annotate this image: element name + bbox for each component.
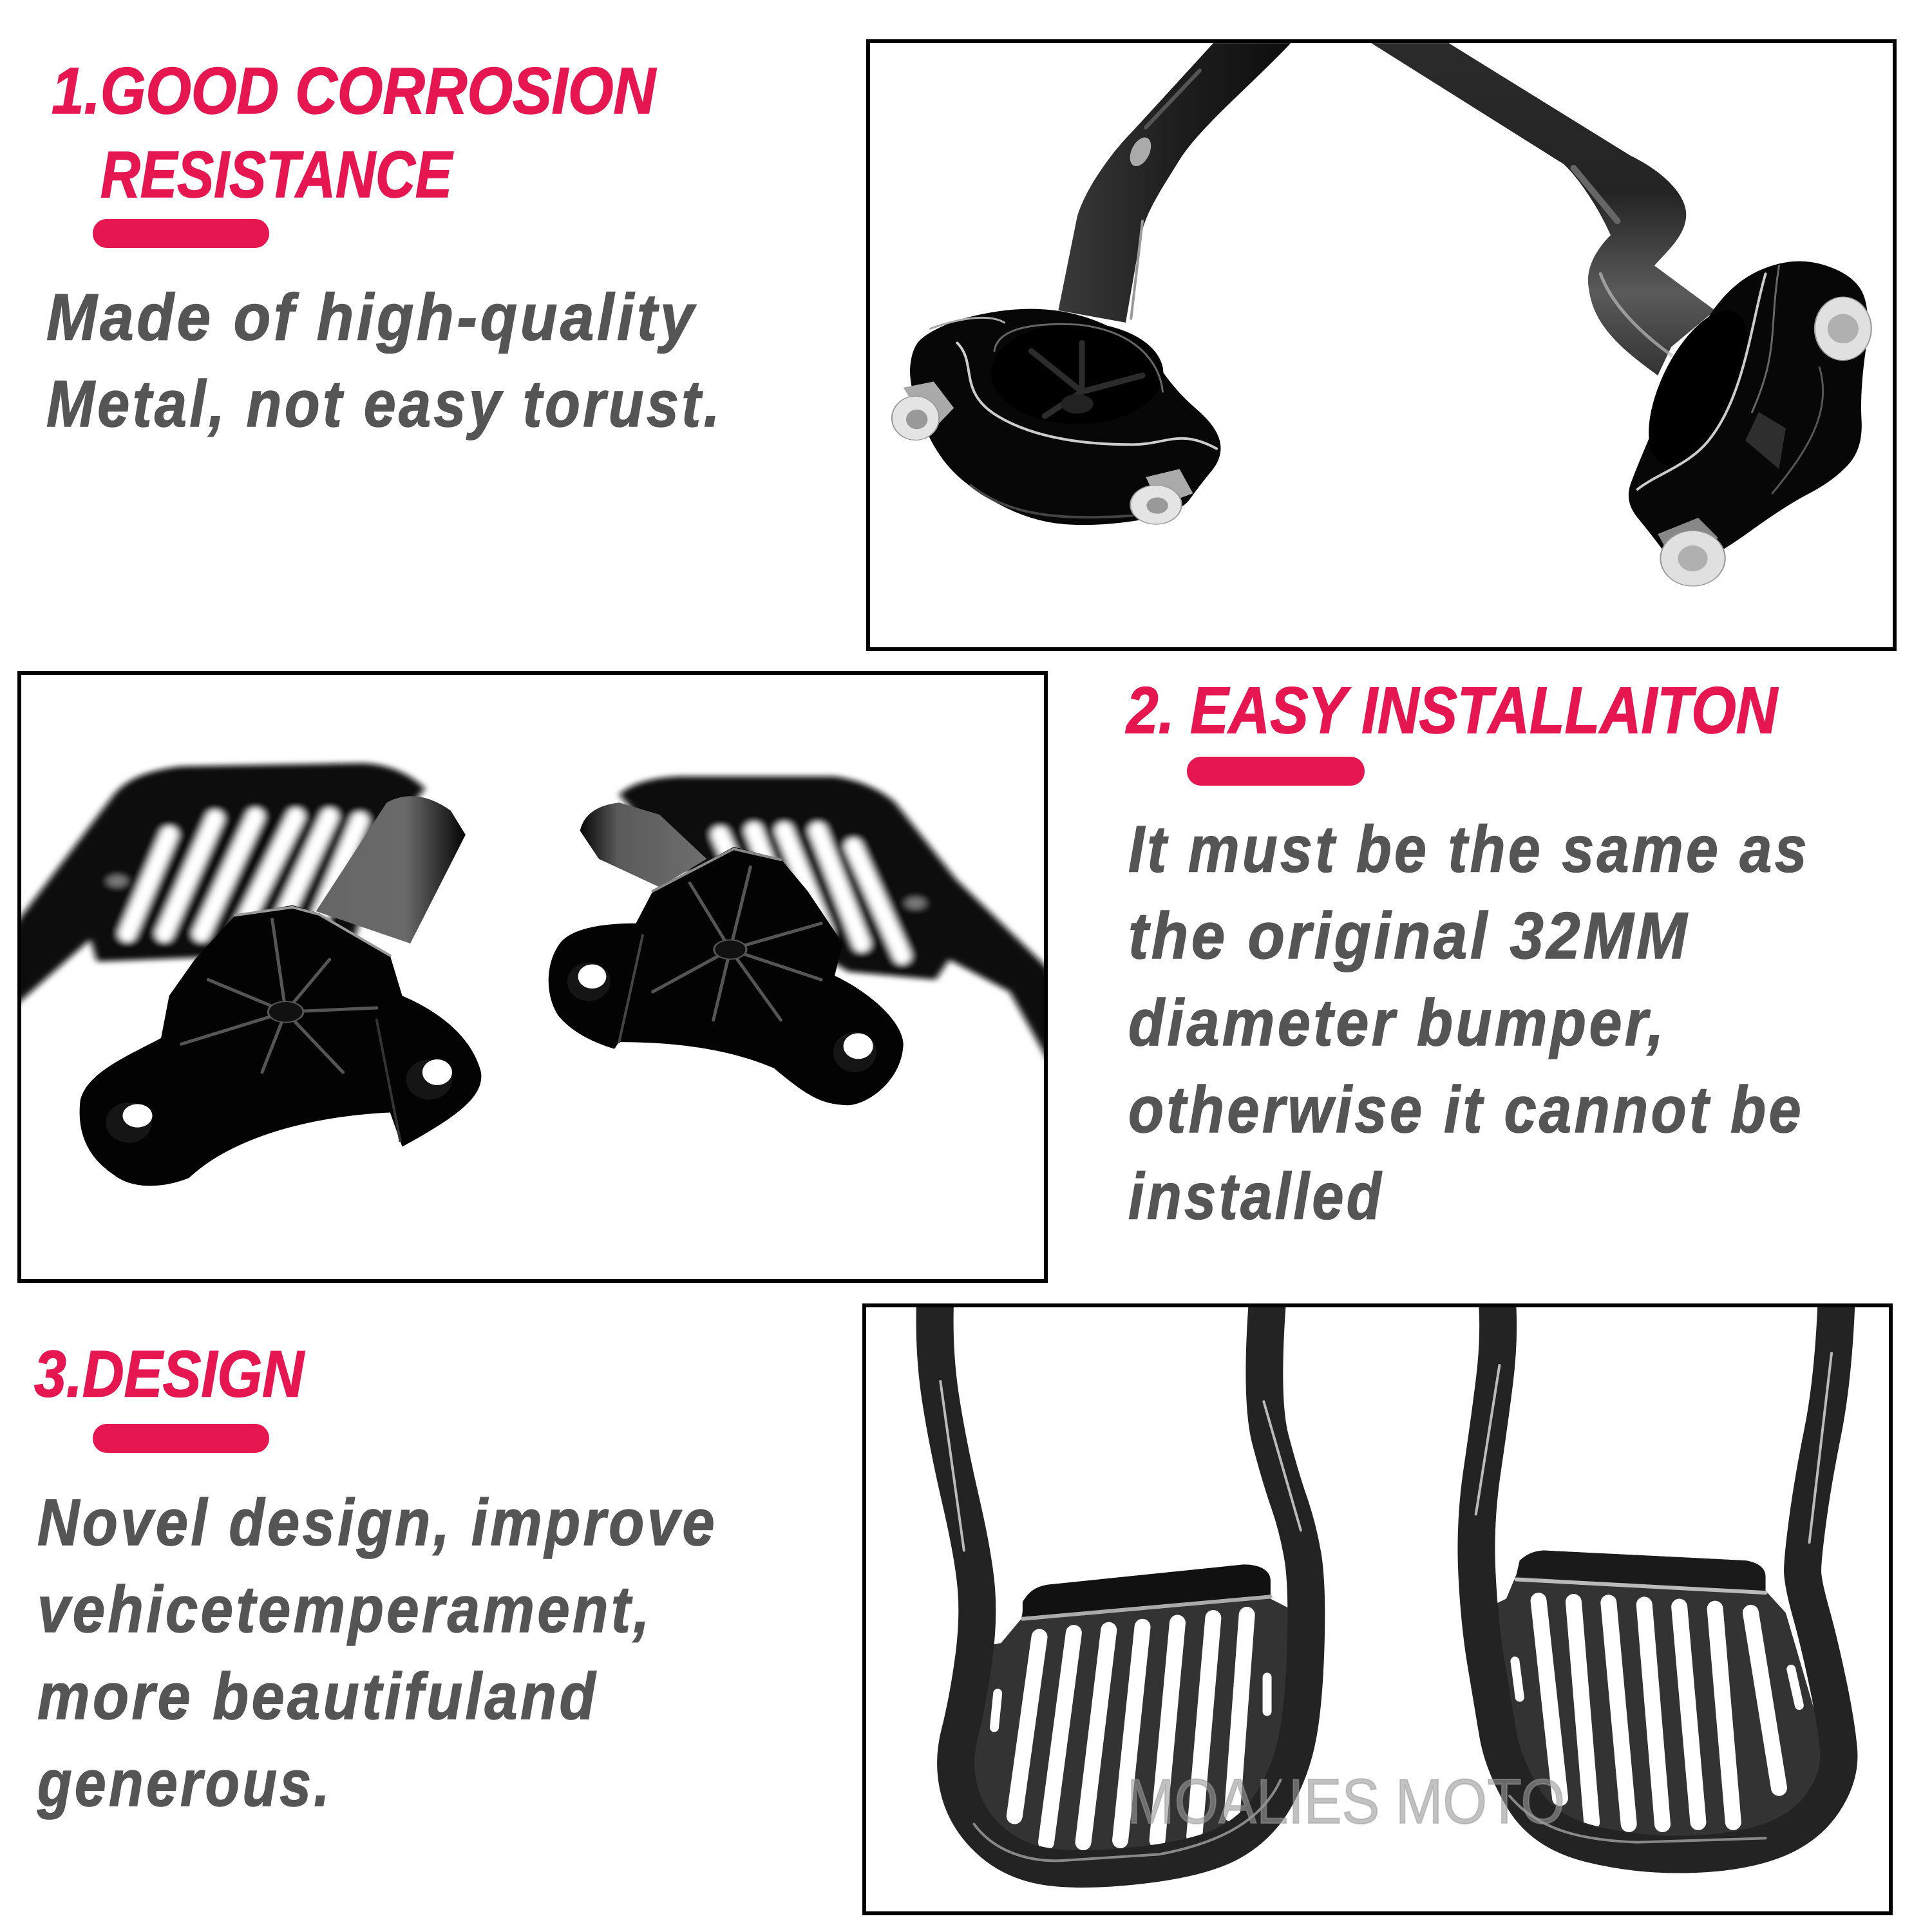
right clamp — [1629, 261, 1868, 565]
panel: photo of racks — [864, 1305, 1891, 1913]
heading: good corrosion resistance: 1.GOOD CORROSION — [52, 54, 657, 128]
left mount — [80, 905, 481, 1186]
panel: feature 1 text — [46, 54, 723, 440]
panel: feature 3 text — [34, 1337, 717, 1820]
body text 3: Novel design, improve — [37, 1486, 717, 1559]
left clamp bolts — [892, 381, 1193, 524]
left rack — [935, 1305, 1306, 1869]
body text 3 — [37, 1486, 717, 1820]
body text 3: more beautifuland — [37, 1660, 598, 1733]
border: mounts photo — [19, 673, 1046, 1281]
left rod — [316, 796, 466, 943]
right rack — [1476, 1305, 1839, 1855]
body text 2: installed — [1128, 1159, 1384, 1233]
body text 3: generous. — [37, 1747, 332, 1820]
body text 2 — [1128, 813, 1810, 1233]
panel: feature 2 text — [1125, 674, 1810, 1233]
panel: photo of mounts — [13, 673, 1064, 1281]
left tube — [1058, 43, 1291, 323]
body text 2: It must be the same as — [1128, 813, 1810, 886]
right tube — [1372, 43, 1715, 375]
right rod — [580, 802, 706, 887]
accent bar 2 — [1187, 757, 1365, 786]
body text 3: vehicetemperament, — [37, 1573, 652, 1646]
right mount — [549, 847, 904, 1105]
accent bar 1 — [93, 219, 269, 248]
blurred rack right — [619, 777, 1064, 1088]
accent bar 3 — [93, 1424, 269, 1453]
body text 1 — [46, 281, 723, 440]
left clamp — [910, 309, 1220, 525]
watermark: MOALIES MOTO — [1127, 1766, 1565, 1837]
body text 2: diameter bumper, — [1128, 986, 1667, 1059]
heading: good corrosion resistance — [52, 54, 657, 211]
heading: design: 3.DESIGN — [34, 1337, 305, 1410]
right clamp bolts — [1658, 297, 1871, 586]
border: racks photo — [864, 1305, 1891, 1913]
border: clamps photo — [868, 41, 1895, 649]
body text 1: Made of high-quality — [46, 281, 697, 354]
blurred rack left — [13, 763, 425, 1008]
body text 2: the original 32MM — [1128, 899, 1690, 972]
body text 1: Metal, not easy torust. — [46, 367, 723, 440]
heading: good corrosion resistance: RESISTANCE — [100, 138, 453, 211]
heading: easy installation: 2. EASY INSTALLAITON — [1125, 674, 1779, 747]
body text 2: otherwise it cannot be — [1128, 1073, 1804, 1146]
panel: photo of clamps — [868, 41, 1895, 649]
